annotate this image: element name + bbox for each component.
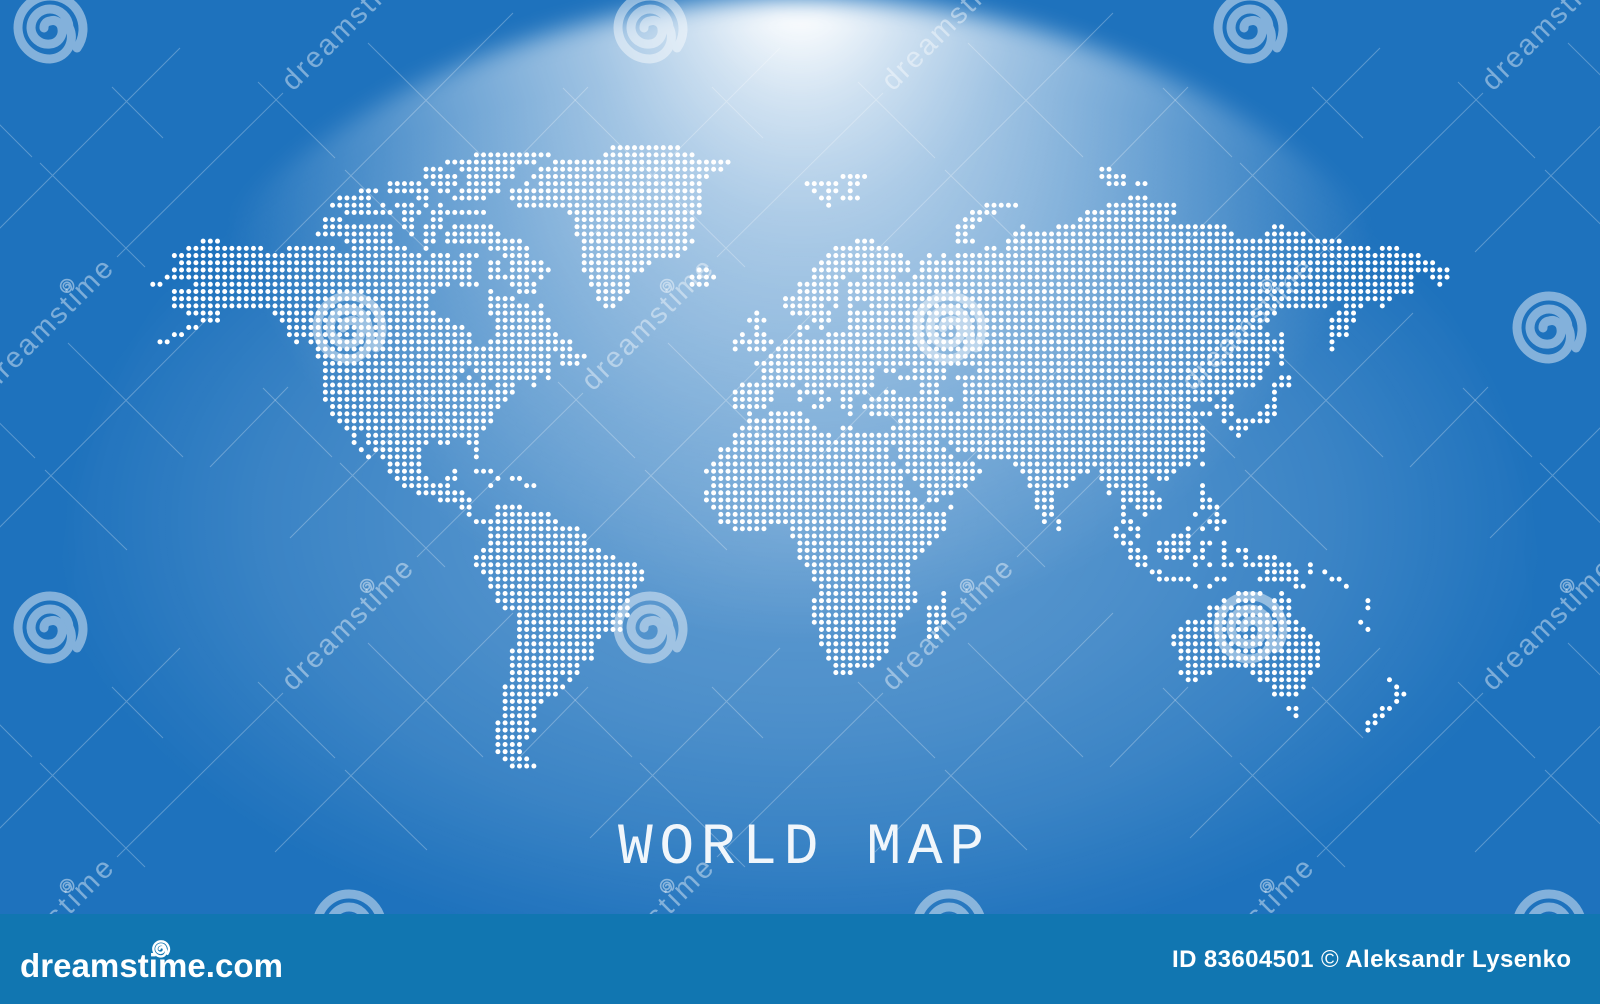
watermark words: dreamstime: [875, 553, 1020, 697]
watermark small spirals: [61, 280, 1574, 892]
watermark words: dreamstime: [1175, 253, 1320, 397]
Eurasia: [735, 205, 1451, 586]
South America: [476, 507, 645, 766]
footer brand: dreamstime.com: [20, 947, 283, 984]
Australia, New Zealand and Pacific islands: [1174, 550, 1407, 730]
footer bar: [0, 914, 1600, 1004]
dotted world map: [153, 148, 1451, 766]
Iceland, Arctic islands: [692, 169, 1149, 284]
Africa: [706, 421, 947, 673]
Greenland: [512, 148, 732, 306]
image credit: ID 83604501 © Aleksandr Lysenko: [1172, 946, 1571, 973]
watermark words: stime: [1239, 852, 1320, 933]
watermark words: stime: [639, 852, 720, 933]
title: WORLD MAP: [618, 816, 984, 881]
North and Central America: [153, 155, 588, 514]
watermark words: dreamstime: [575, 253, 720, 397]
watermark words: stime: [39, 852, 120, 933]
footer logo spiral: [153, 941, 169, 956]
spotlight glow dome: [118, 0, 1482, 914]
watermark words: dreamstime: [275, 553, 420, 697]
